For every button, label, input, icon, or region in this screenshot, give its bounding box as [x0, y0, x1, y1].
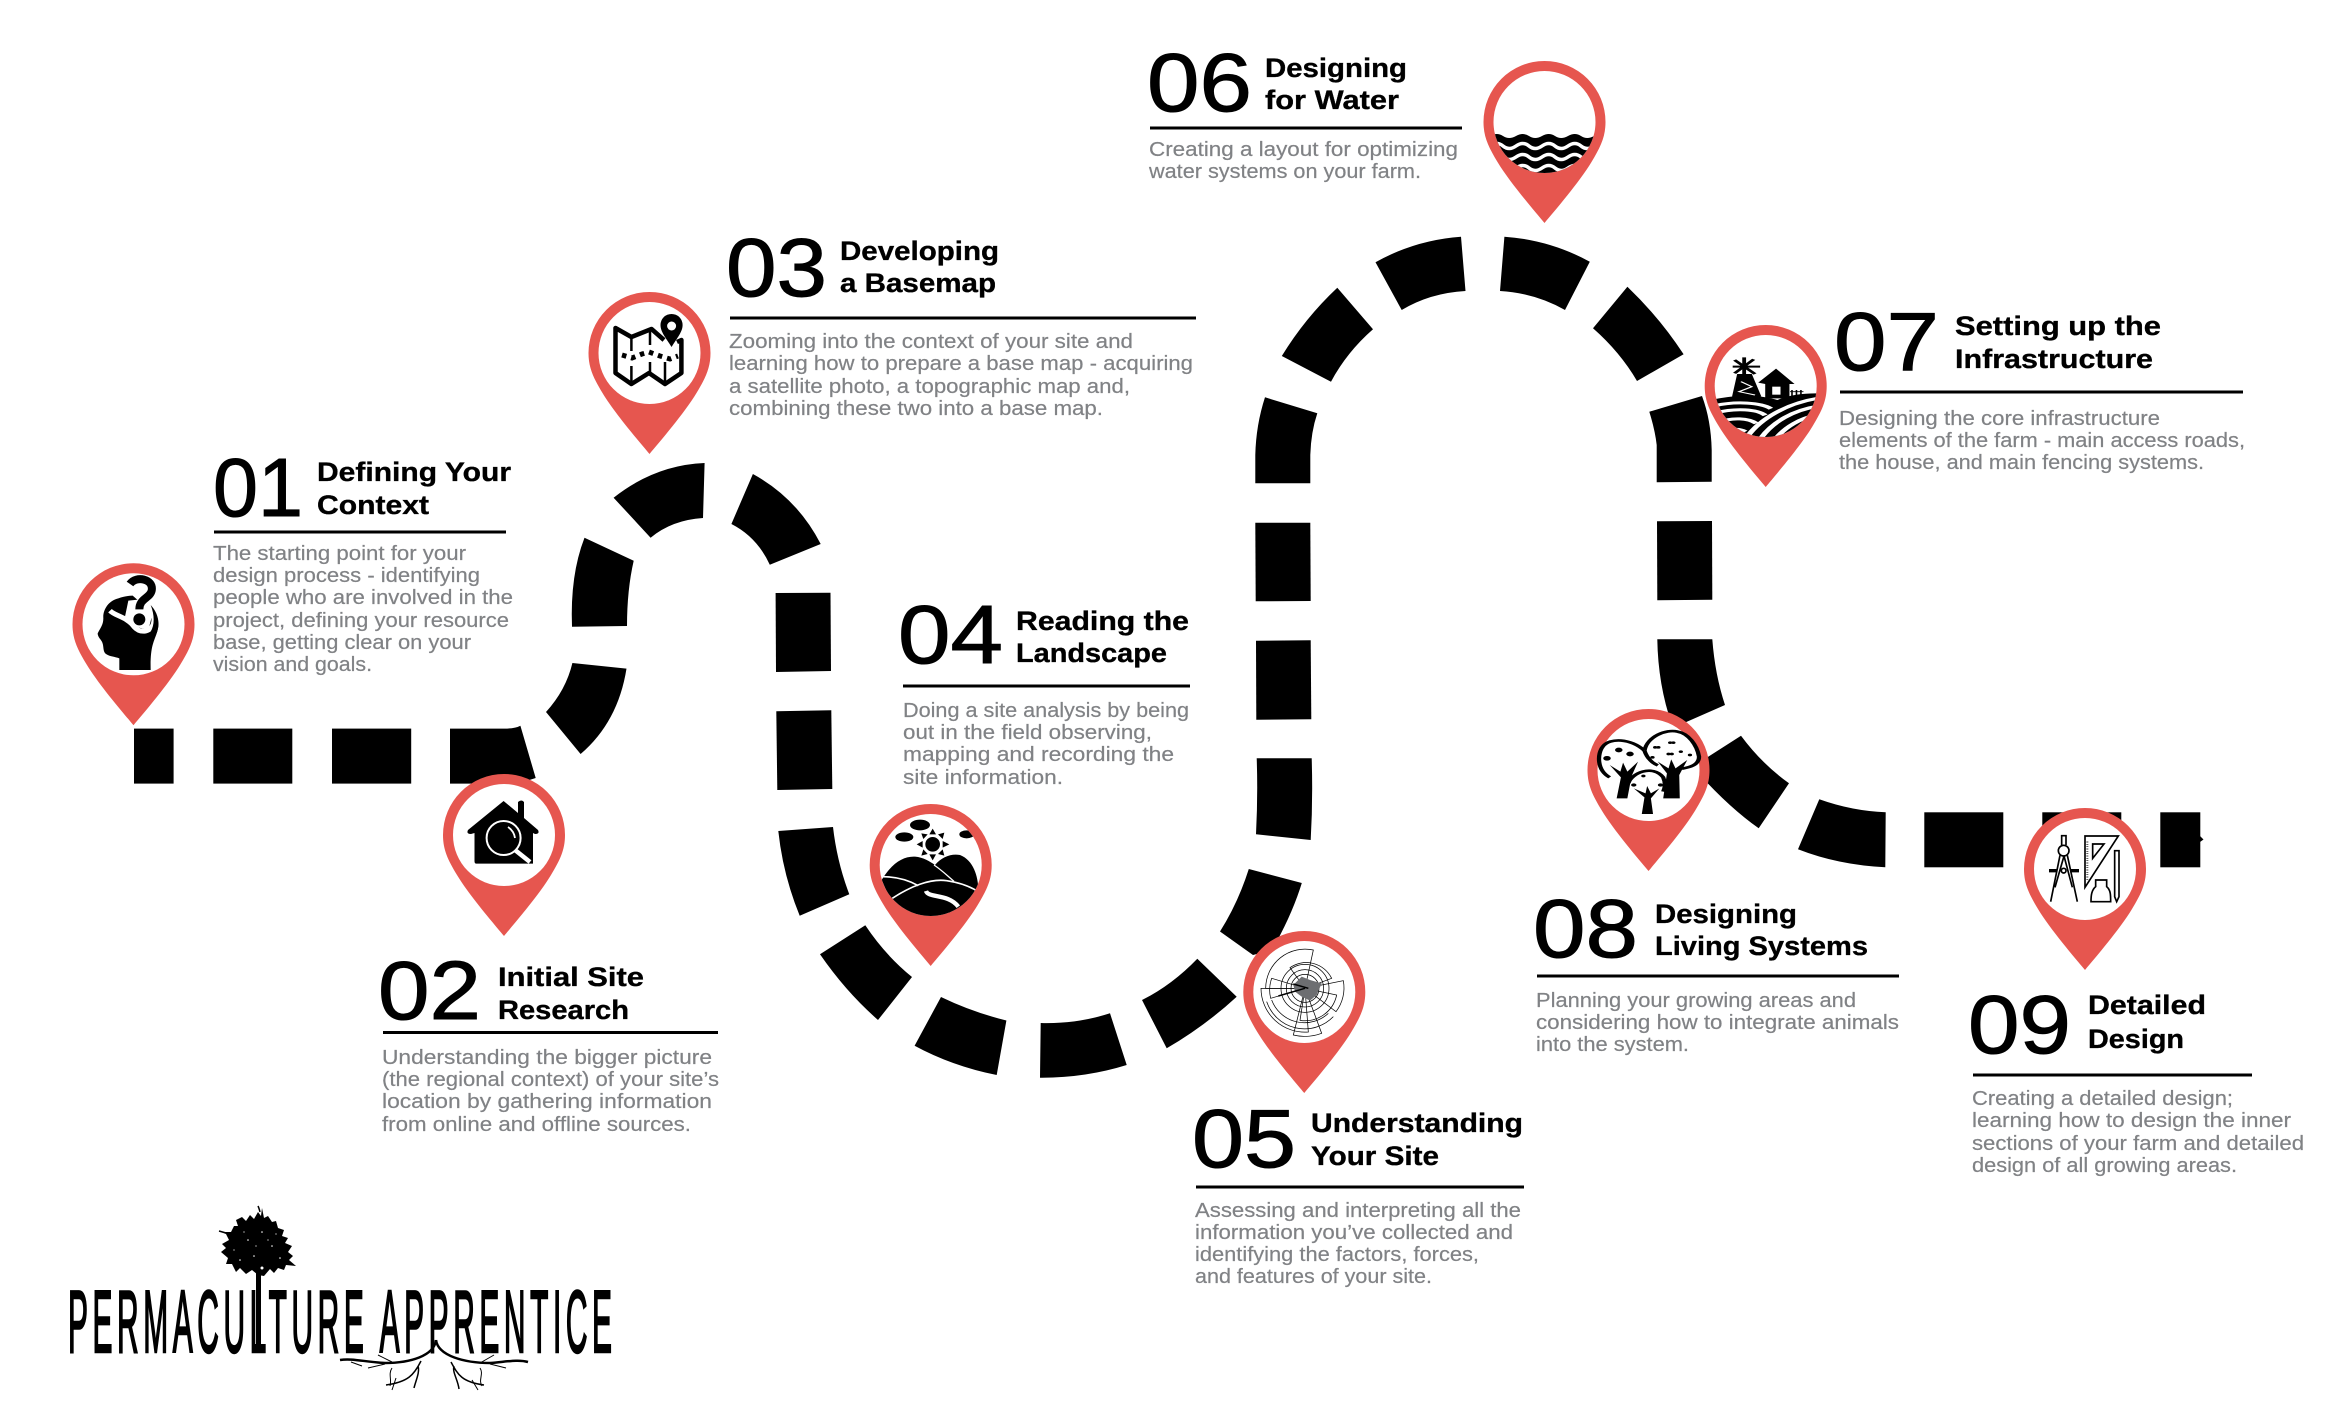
pin 04: sun over landscape [870, 804, 992, 966]
step 01: Defining Your Context: Defining Your [317, 457, 512, 487]
step 05: Understanding Your Site: Understanding [1311, 1108, 1523, 1138]
icon: tree crown and trunk [219, 1206, 296, 1352]
step 04: Reading the Landscape [898, 588, 1190, 789]
step 09: Detailed Design: 09 [1968, 978, 2071, 1071]
step 03: Developing a Basemap: 03 [726, 221, 827, 314]
step 04: Reading the Landscape: mapping and recording the [903, 744, 1174, 766]
step 01: Defining Your Context: design process - identifying [213, 565, 480, 587]
step 05: Understanding Your Site: information you’ve collected and [1195, 1222, 1513, 1244]
step 09: Detailed Design: Detailed [2088, 990, 2206, 1020]
pin 01: head with question mark [72, 563, 195, 725]
step 02: Initial Site Research: Initial Site [498, 962, 644, 992]
step 05: Understanding Your Site: identifying the factors, forces, [1195, 1244, 1479, 1266]
step 08: Designing Living Systems: considering how to integrate animals [1536, 1012, 1899, 1034]
step 08: Designing Living Systems: Planning your growing areas and [1536, 990, 1856, 1012]
icon: roots [340, 1340, 528, 1390]
step 03: Developing a Basemap: Developing [840, 236, 999, 266]
step 02: Initial Site Research: Understanding the bigger picture [382, 1047, 712, 1069]
step 07: Setting up the Infrastructure: Infrastructure [1955, 344, 2153, 374]
step 07: Setting up the Infrastructure: Setting up the [1955, 311, 2161, 341]
icon: head with question mark [98, 579, 159, 670]
step 03: Developing a Basemap: Zooming into the context of your site and [729, 331, 1133, 353]
step 07: Setting up the Infrastructure: the house, and main fencing systems. [1839, 452, 2204, 474]
step 05: Understanding Your Site: 05 [1192, 1092, 1296, 1185]
step 06: Designing for Water [1147, 36, 1462, 183]
step 06: Designing for Water: Creating a layout for optimizing [1149, 139, 1458, 161]
logo: Permaculture Apprentice with tree and roots: PERMACULTURE APPRENTICE [68, 1273, 612, 1371]
pin 06: water [1484, 61, 1606, 223]
step 04: Reading the Landscape: Reading the [1016, 606, 1189, 636]
step 02: Initial Site Research: Research [498, 995, 629, 1025]
step 09: Detailed Design: Design [2088, 1024, 2184, 1054]
icon: compass, set square, ink and pencil [2049, 836, 2119, 902]
step 02: Initial Site Research: (the regional context) of your site’s [382, 1069, 719, 1091]
step 02: Initial Site Research: 02 [378, 944, 481, 1037]
icon: hills, sun, clouds and river [882, 820, 978, 920]
icon: farm with windmill and house [1716, 357, 1816, 437]
step 06: Designing for Water: for Water [1265, 85, 1400, 115]
step 08: Designing Living Systems: into the system. [1536, 1034, 1689, 1056]
step 05: Understanding Your Site: Assessing and interpreting all the [1195, 1200, 1521, 1222]
step 01: Defining Your Context [213, 441, 513, 676]
step 07: Setting up the Infrastructure: elements of the farm - main access roads, [1839, 430, 2245, 452]
step 06: Designing for Water: Designing [1265, 53, 1407, 83]
icon: house with magnifying glass [467, 800, 539, 864]
step 03: Developing a Basemap: a satellite photo, a topographic map and, [729, 376, 1130, 398]
step 01: Defining Your Context: 01 [213, 441, 303, 534]
step 02: Initial Site Research: from online and offline sources. [382, 1114, 691, 1136]
step 01: Defining Your Context: vision and goals. [213, 654, 372, 676]
step 07: Setting up the Infrastructure: 07 [1834, 295, 1939, 388]
step 08: Designing Living Systems: 08 [1533, 882, 1638, 975]
icon: folded map with location marker [616, 314, 683, 384]
step 04: Reading the Landscape: out in the field observing, [903, 722, 1152, 744]
step 03: Developing a Basemap [726, 221, 1196, 420]
step 08: Designing Living Systems: Living Systems [1655, 931, 1868, 961]
step 01: Defining Your Context: The starting point for your [213, 543, 466, 565]
icon: water waves [1495, 134, 1594, 173]
icon: three fruit trees [1599, 731, 1699, 814]
step 09: Detailed Design: design of all growing areas. [1972, 1155, 2237, 1177]
step 04: Reading the Landscape: Doing a site analysis by being [903, 700, 1189, 722]
step 04: Reading the Landscape: Landscape [1016, 638, 1167, 668]
pin 05: sector analysis diagram [1243, 931, 1365, 1093]
step 09: Detailed Design: Creating a detailed design; [1972, 1088, 2233, 1110]
step 01: Defining Your Context: base, getting clear on your [213, 632, 471, 654]
step 08: Designing Living Systems: Designing [1655, 899, 1797, 929]
step 04: Reading the Landscape: site information. [903, 767, 1063, 789]
dashed winding road [134, 237, 2204, 1078]
step 01: Defining Your Context: Context [317, 490, 429, 520]
step 07: Setting up the Infrastructure [1834, 295, 2245, 474]
step 07: Setting up the Infrastructure: Designing the core infrastructure [1839, 408, 2160, 430]
step 05: Understanding Your Site: Your Site [1311, 1141, 1439, 1171]
step 06: Designing for Water: 06 [1147, 36, 1252, 129]
pin 07: farm [1704, 325, 1828, 487]
step 09: Detailed Design: sections of your farm and detailed [1972, 1133, 2304, 1155]
pin 09: drafting tools [2024, 808, 2146, 970]
step 09: Detailed Design: learning how to design the inner [1972, 1110, 2291, 1132]
step 05: Understanding Your Site [1192, 1092, 1524, 1288]
step 02: Initial Site Research: location by gathering information [382, 1091, 712, 1113]
step 03: Developing a Basemap: a Basemap [840, 268, 996, 298]
step 05: Understanding Your Site: and features of your site. [1195, 1266, 1432, 1288]
step 01: Defining Your Context: project, defining your resource [213, 610, 509, 632]
step 04: Reading the Landscape: 04 [898, 588, 1003, 681]
logo: Permaculture Apprentice with tree and roots [68, 1206, 612, 1390]
step 08: Designing Living Systems [1533, 882, 1899, 1056]
pin 03: map [588, 292, 710, 454]
step 09: Detailed Design [1968, 978, 2304, 1177]
step 06: Designing for Water: water systems on your farm. [1148, 161, 1421, 183]
pin 08: fruit trees [1588, 709, 1710, 871]
step 01: Defining Your Context: people who are involved in the [213, 587, 513, 609]
icon: sector and zone diagram [1261, 949, 1344, 1036]
pin 02: house with magnifier [443, 774, 565, 936]
step 02: Initial Site Research [378, 944, 719, 1136]
step 03: Developing a Basemap: combining these two into a base map. [729, 398, 1103, 420]
step 03: Developing a Basemap: learning how to prepare a base map - acquiring [729, 353, 1193, 375]
